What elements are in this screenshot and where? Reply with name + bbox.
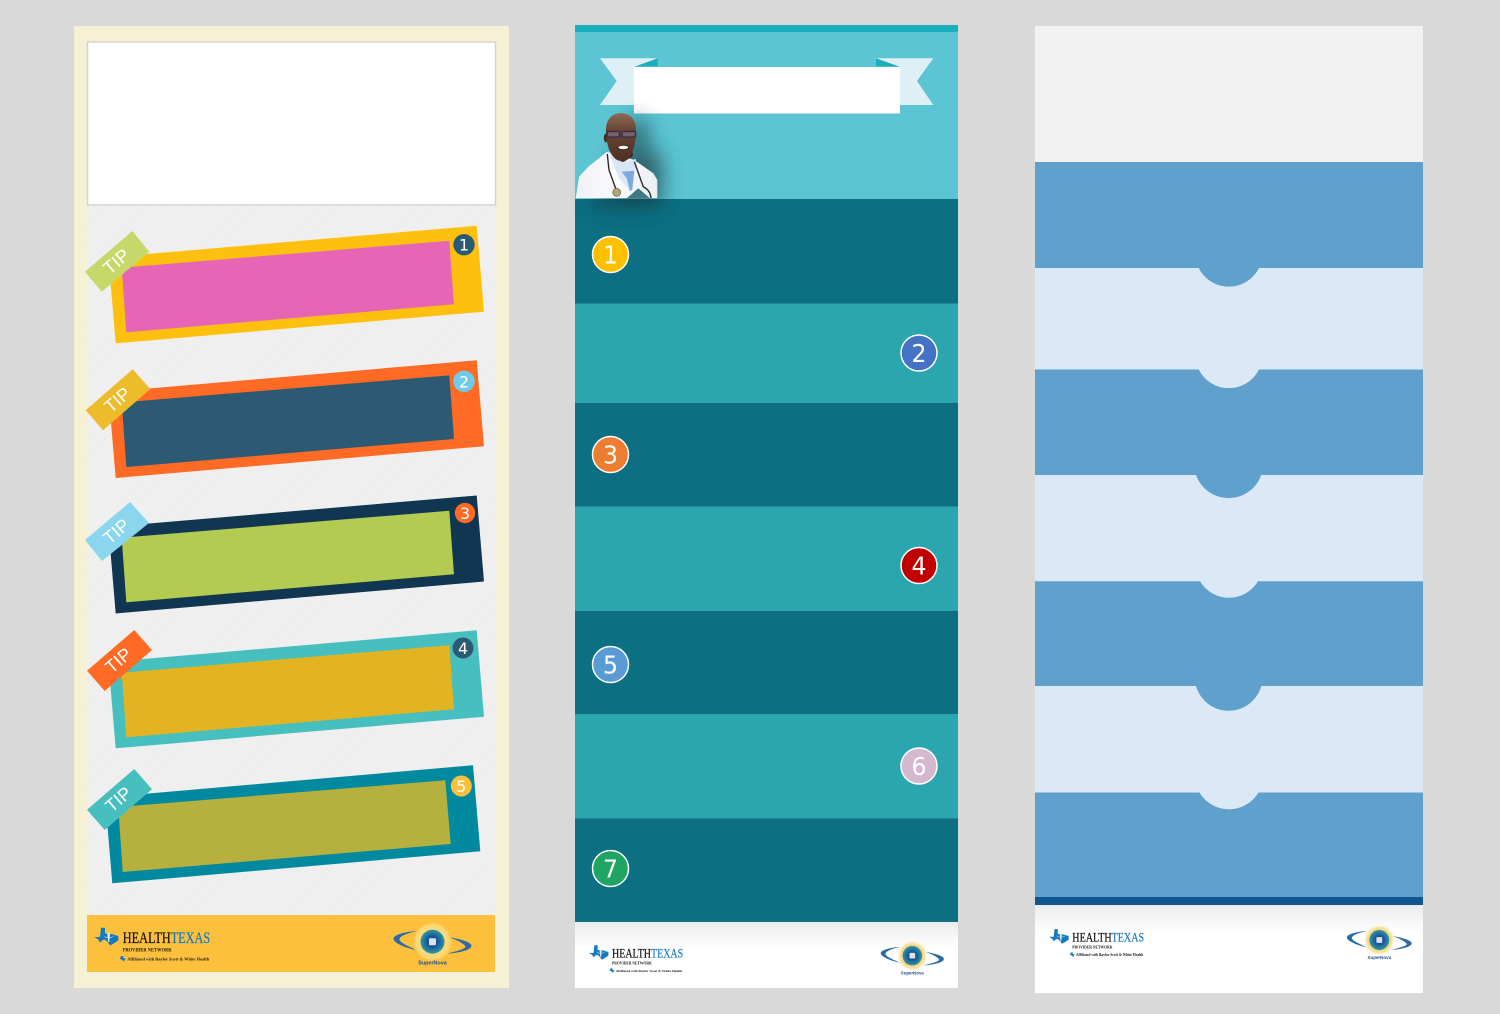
logo: HealthTexas: TEXAS: [651, 946, 683, 961]
number badge 1: [592, 236, 628, 272]
number badge 1: 1: [603, 240, 618, 270]
footer band: [87, 915, 495, 972]
blue band 1 with tab: [1035, 162, 1423, 287]
blue band 4 with notch: [1035, 792, 1423, 897]
dark bar: [1035, 897, 1423, 905]
panel: tips template: [74, 26, 509, 988]
number badge 7: [592, 850, 628, 886]
logo: SuperNova: [1347, 924, 1412, 960]
title box: [88, 42, 496, 205]
logo: HealthTexas: PROVIDER NETWORK: [123, 948, 172, 954]
number badge 3: 3: [603, 440, 618, 470]
tip card 2: TIP: [100, 383, 135, 417]
logo: HealthTexas: [94, 928, 210, 962]
tip card 3: 3: [460, 504, 470, 523]
number badge 4: 4: [912, 552, 926, 580]
band 6: [575, 714, 958, 818]
logo: HealthTexas: HEALTH: [612, 946, 651, 961]
logo: SuperNova: SuperNova: [1368, 955, 1392, 960]
band 7: [575, 818, 958, 922]
logo: SuperNova: [881, 940, 944, 975]
panel: puzzle band template: [1035, 26, 1423, 993]
top strip: [575, 25, 958, 32]
number badge 2: 2: [912, 339, 926, 368]
logo: HealthTexas: Affiliated with Baylor Scott & White Health: [127, 956, 210, 962]
number badge 2: [901, 335, 937, 371]
logo: HealthTexas: HEALTH: [1072, 930, 1112, 945]
tip card 1: 1: [459, 236, 469, 255]
number badge 5: 5: [603, 650, 618, 680]
tip card 4: [87, 630, 484, 748]
band 2: [575, 304, 958, 404]
doctor shadow: [592, 118, 662, 206]
logo: SuperNova: [394, 922, 472, 967]
logo: HealthTexas: PROVIDER NETWORK: [1072, 945, 1113, 950]
logo: HealthTexas: Affiliated with Baylor Scott & White Health: [1076, 953, 1143, 957]
number badge 6: [901, 748, 937, 784]
footer band: [1035, 905, 1423, 993]
number badge 6: 6: [912, 752, 926, 781]
blue band 2 with notch and tab: [1035, 370, 1423, 498]
tip card 3: [85, 496, 484, 614]
logo: HealthTexas: [1049, 929, 1144, 957]
number badge 5: [592, 646, 628, 682]
tip card 5: 5: [456, 777, 466, 796]
tip card 5: [87, 765, 480, 883]
ribbon banner: [600, 58, 933, 114]
logo: HealthTexas: PROVIDER NETWORK: [612, 961, 652, 966]
logo: SuperNova: SuperNova: [418, 961, 448, 967]
tip card 2: 2: [459, 372, 469, 391]
tip card 3: TIP: [99, 515, 134, 548]
number badge 4: [901, 548, 937, 584]
tip card 4: TIP: [101, 644, 136, 677]
title area: [1035, 26, 1423, 162]
blue band 3 with notch and tab: [1035, 581, 1423, 711]
panel: numbered list template: [575, 25, 958, 988]
tip card 2: [86, 360, 484, 478]
logo: HealthTexas: TEXAS: [1112, 930, 1144, 945]
number badge 7: 7: [603, 854, 618, 884]
tip card 1: TIP: [99, 245, 134, 278]
light band background: [1035, 268, 1423, 897]
band 5: [575, 611, 958, 714]
tip card 1: [85, 226, 484, 343]
band 4: [575, 506, 958, 611]
band 1: [575, 199, 958, 304]
logo: HealthTexas: Affiliated with Baylor Scott & White Health: [616, 969, 682, 973]
tip card 5: TIP: [101, 783, 136, 816]
logo: HealthTexas: [589, 945, 683, 973]
logo: SuperNova: SuperNova: [901, 970, 924, 975]
logo: HealthTexas: TEXAS: [171, 930, 210, 947]
logo: HealthTexas: HEALTH: [123, 930, 171, 947]
footer band: [575, 922, 958, 988]
header background: [575, 32, 958, 199]
band 3: [575, 403, 958, 506]
number badge 3: [592, 436, 628, 472]
illustration: doctor: [576, 113, 657, 198]
tip card 4: 4: [458, 639, 468, 658]
